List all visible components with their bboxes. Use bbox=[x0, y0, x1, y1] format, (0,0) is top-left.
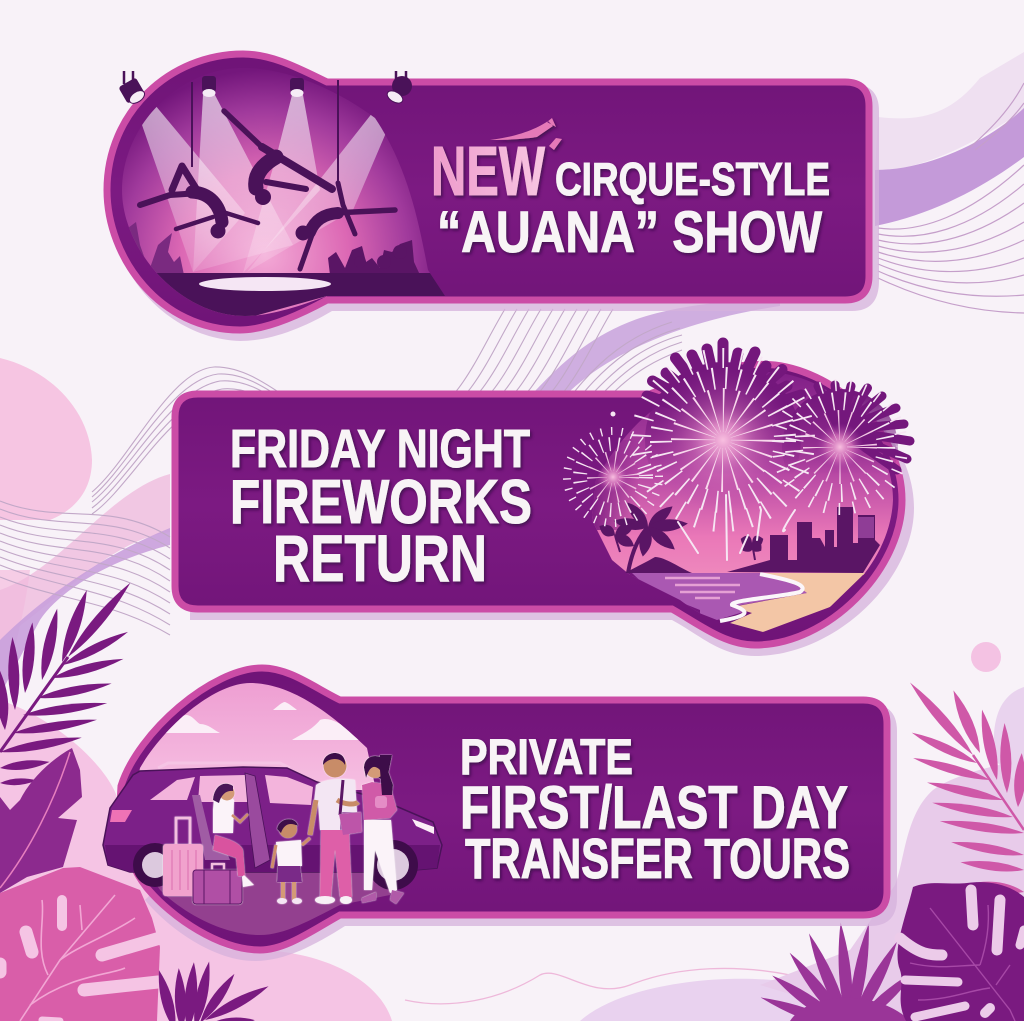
panel text bbox=[230, 419, 532, 595]
panel text bbox=[431, 118, 830, 265]
acrobat: right bbox=[296, 183, 395, 269]
blob: left pink bbox=[0, 358, 92, 520]
illustration: fireworks over beach bbox=[567, 343, 910, 640]
panel text bbox=[460, 729, 850, 891]
person: father bbox=[310, 753, 362, 904]
wave: top right bbox=[875, 52, 1024, 313]
car bbox=[103, 763, 442, 890]
car windows bbox=[150, 775, 313, 805]
leaf: pink monstera bbox=[0, 867, 160, 1021]
blob: upper right lavender bbox=[994, 687, 1024, 790]
blob: lower left bbox=[0, 700, 392, 1021]
firework: main burst bbox=[641, 358, 805, 522]
person: girl bbox=[213, 784, 254, 887]
lower sill bbox=[105, 845, 440, 872]
leaf: upper left palm bbox=[0, 580, 134, 786]
heading line: transfer tours: TRANSFER TOURS bbox=[465, 827, 850, 891]
heading line: friday night: FRIDAY NIGHT bbox=[230, 419, 530, 479]
lamps bbox=[118, 71, 412, 106]
firework: left burst bbox=[567, 431, 659, 523]
panel: fireworks bbox=[175, 343, 914, 656]
ground bbox=[158, 872, 390, 935]
luggage bbox=[163, 818, 242, 904]
crowd bbox=[129, 222, 419, 273]
tail light bbox=[110, 810, 132, 822]
band: left lavender bbox=[0, 528, 170, 695]
dark coast bbox=[628, 573, 700, 613]
blob: lower right lavender bbox=[760, 760, 1024, 1021]
wave lines: left bbox=[0, 501, 170, 635]
heading line: private: PRIVATE bbox=[460, 729, 633, 785]
water bbox=[630, 573, 807, 620]
wave: bottom line bbox=[405, 968, 790, 1004]
stage floor bbox=[157, 273, 445, 316]
heading line: fireworks: FIREWORKS bbox=[230, 468, 532, 537]
illustration: family and car bbox=[103, 680, 442, 935]
panel shadow bbox=[108, 84, 879, 341]
blob: left lower pale bbox=[0, 570, 30, 700]
hill bbox=[625, 557, 692, 573]
panel: cirque show bbox=[100, 50, 879, 341]
heading line: auana show: “AUANA” SHOW bbox=[437, 200, 822, 265]
beach bbox=[730, 573, 865, 632]
leaf: bottom small palm bbox=[154, 960, 271, 1021]
firework: right burst bbox=[778, 385, 902, 509]
trampoline bbox=[199, 277, 331, 291]
clouds bbox=[162, 702, 365, 740]
heading line: cirque style: CIRQUE-STYLE bbox=[555, 153, 830, 205]
person: child bbox=[272, 819, 310, 904]
spotlight beams bbox=[142, 95, 386, 272]
blob: bottom lavender bbox=[580, 979, 880, 1021]
acrobat: left bbox=[140, 166, 258, 238]
leaf: bottom purple palm bbox=[755, 922, 921, 1021]
band: left pink bbox=[0, 474, 170, 640]
water highlights bbox=[665, 578, 740, 598]
panel body bbox=[175, 364, 902, 645]
panel shadow bbox=[190, 370, 914, 656]
wheels bbox=[133, 843, 177, 887]
acrobat: centre bbox=[224, 111, 332, 205]
panel shadow bbox=[145, 704, 897, 961]
dot bbox=[971, 642, 1001, 672]
illustration: aerial stage bbox=[119, 71, 445, 316]
heading line: first last day: FIRST/LAST DAY bbox=[460, 774, 848, 841]
ropes bbox=[192, 80, 338, 183]
foam bbox=[720, 574, 803, 621]
panel: transfer tours bbox=[103, 668, 897, 961]
person: mother bbox=[362, 755, 404, 904]
wave: centre bbox=[92, 298, 780, 514]
leaf: right pink palm bbox=[906, 679, 1024, 896]
falling sparks bbox=[678, 495, 795, 560]
panel body bbox=[107, 54, 869, 330]
palm trees bbox=[597, 499, 765, 573]
firework: dark backing bbox=[645, 343, 910, 518]
seat bbox=[192, 795, 230, 860]
heading word: NEW: NEW bbox=[431, 132, 545, 210]
heading line: return: RETURN bbox=[273, 521, 487, 595]
leaf: dark monstera right bbox=[897, 882, 1024, 1021]
leaf: left purple bbox=[0, 748, 82, 893]
panel body bbox=[120, 668, 887, 950]
car door bbox=[245, 773, 270, 868]
head light bbox=[412, 819, 434, 834]
city skyline bbox=[727, 507, 880, 573]
